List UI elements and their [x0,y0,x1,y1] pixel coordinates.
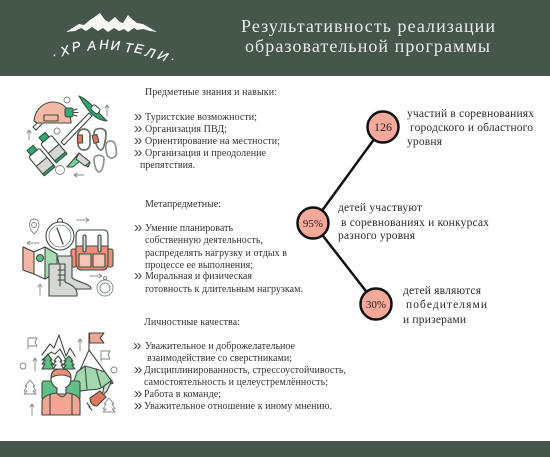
text block: meta-subject skills [134,199,303,295]
icon group: hiker in the mountains [20,333,117,415]
text block: personal qualities: » [133,337,141,354]
text block: personal qualities: самостоятельность и целеустремлённость; [144,377,328,388]
node: 95%: 95% [303,218,323,230]
icon: helmet [33,102,78,130]
text block: subject knowledge: » [134,132,142,149]
label: participation [338,202,489,242]
text block: meta-subject skills: Метапредметные: [145,199,221,210]
logo: Хранители: Р [70,38,82,55]
text block: subject knowledge: » [134,120,142,137]
text block: personal qualities: » [134,361,142,378]
text block: subject knowledge: Туристские возможности; [145,112,257,123]
node: 126: 126 [374,120,392,134]
text block: subject knowledge: » [134,144,142,161]
logo: Хранители: Е [133,40,145,57]
label: participation: разного уровня [338,230,416,242]
icon: location pin [30,219,39,234]
diagram: results tree [298,112,398,320]
text block: meta-subject skills: процессе ее выполнения; [145,260,253,271]
text block: personal qualities [133,317,346,414]
text block: subject knowledge: Организация ПВД; [145,124,227,135]
header band [0,0,550,76]
decorative small marks [27,97,109,177]
text block: subject knowledge [134,87,280,171]
text block: meta-subject skills: » [134,267,142,284]
icon: bottles [25,130,67,176]
title: Результативность реализации [241,16,495,36]
text block: subject knowledge: » [134,108,142,125]
footer band [0,441,550,457]
text block: meta-subject skills: распределять нагрузку и отдых в [145,248,287,259]
node: 126 [368,112,398,142]
title [241,16,495,56]
text block: personal qualities: взаимодействие со сверстниками; [147,353,292,364]
icon: boots [49,256,91,296]
text block: meta-subject skills: Умение планировать [145,223,233,234]
label: winners: и призерами [403,314,466,326]
logo: Хранители: Т [124,40,135,56]
title: образовательной программы [245,36,490,56]
label: winners: победителями [406,299,487,311]
node: 95% [298,208,328,238]
logo: Хранители: Л [143,44,157,61]
text block: meta-subject skills: » [134,219,142,236]
label: participation: детей участвуют [338,202,422,214]
icon: compass [46,218,74,250]
icon: distant peaks and pines [42,335,75,369]
logo: Хранители: И [156,47,171,65]
icon: ice axe [61,96,107,145]
text block: personal qualities: » [134,385,142,402]
logo: Хранители: И [110,38,121,53]
icon: carabiners [78,128,117,172]
text block: meta-subject skills: собственную деятельность, [145,235,263,246]
label: competitions: участий в соревнованиях [407,108,534,120]
icon: folding knife [67,153,90,167]
logo: Хранители: . [171,48,175,63]
node: 30%: 30% [366,299,386,311]
icon: pocket watch [97,276,113,296]
text block: personal qualities: Личностные качества: [144,317,240,328]
text block: personal qualities: Дисциплинированность, стрессоустойчивость, [144,365,346,376]
logo: Хранители: А [85,38,97,54]
icon: hiker [42,369,80,415]
text block: personal qualities: Уважительное отношение к иному мнению. [144,401,332,412]
text block: subject knowledge: Предметные знания и навыки: [145,87,277,98]
label: competitions: уровня [407,136,443,148]
label: competitions [407,108,534,148]
logo: Хранители: . [53,44,57,59]
decorative flags, trees, circles and arrows [20,338,117,415]
label: competitions: городского и областного [410,122,533,134]
icon: flashlight [87,380,112,410]
label: winners [403,285,487,326]
text block: meta-subject skills: готовность к длительным нагрузкам. [145,284,303,295]
text block: subject knowledge: Ориентирование на местности; [145,136,280,147]
icon: summit flag and mountain [70,333,113,392]
icon group: hiking gear [23,218,113,296]
icon: backpack [71,230,113,270]
node: 30% [360,288,392,320]
icon: map [23,247,57,279]
text block: meta-subject skills: Моральная и физическая [145,271,252,282]
logo: Хранители: Н [99,37,109,52]
label: winners: детей являются [403,285,482,297]
text block: subject knowledge: препятствия. [140,160,195,171]
logo: Хранители: Х [58,42,72,59]
text block: personal qualities: Работа в команде; [144,389,221,400]
icon group: climbing equipment [25,96,117,177]
label: participation: в соревнованиях и конкурсах [341,217,489,229]
text block: personal qualities: » [134,397,142,414]
text block: personal qualities: Уважительное и доброжелательное [145,341,296,352]
arrows [27,218,102,295]
text block: subject knowledge: Организация и преодоление [145,148,267,159]
logo: Хранители [53,13,175,65]
